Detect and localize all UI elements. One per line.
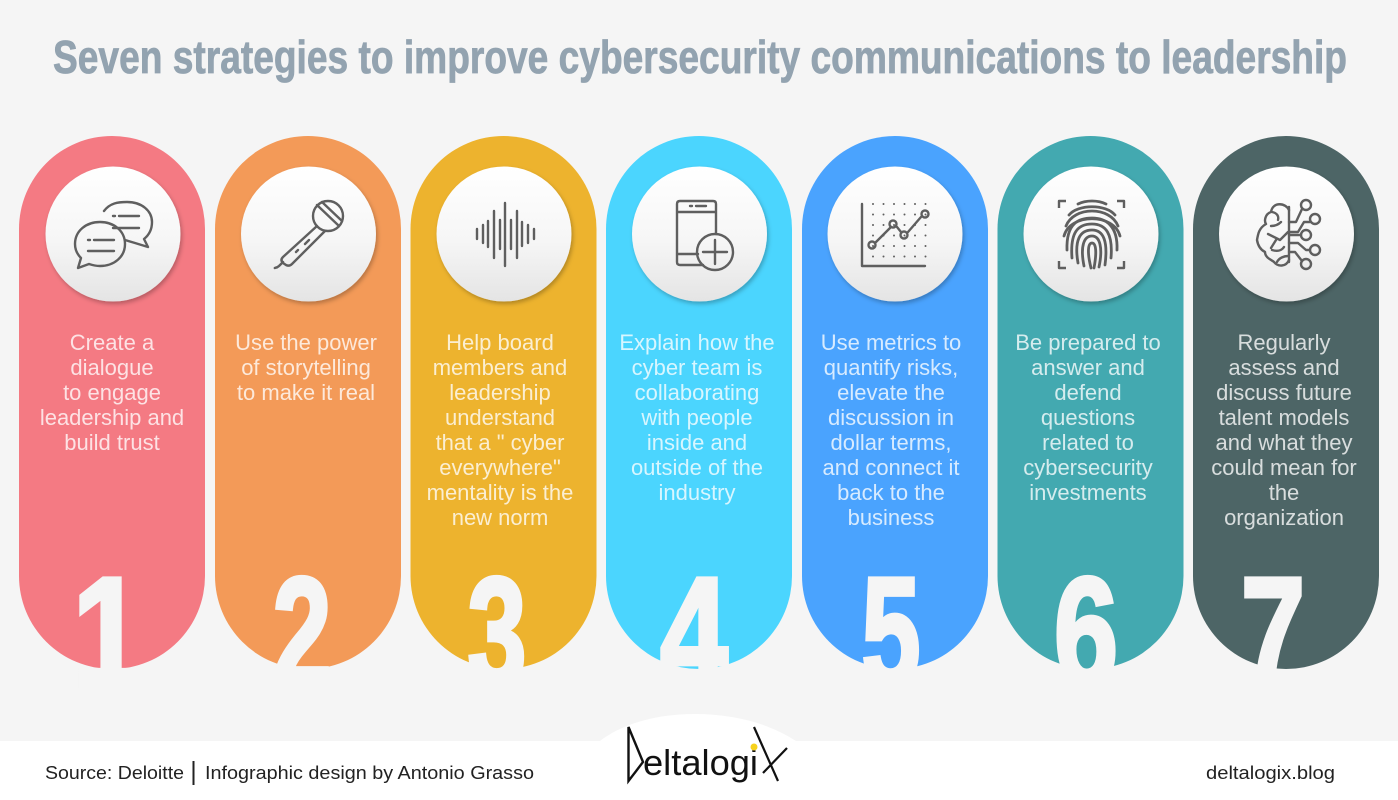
text: strategy 6: Be prepared to — [1015, 330, 1161, 355]
text: strategy 3: understand — [445, 405, 555, 430]
logo: Deltalogix: eltalogi — [643, 742, 758, 783]
text: strategy 6: investments — [1029, 480, 1147, 505]
text: strategy 4: cyber team is — [632, 355, 762, 380]
icon circle 4 — [632, 166, 767, 302]
icon circle 7 — [1219, 166, 1354, 302]
text: strategy 6: related to — [1042, 430, 1134, 455]
text: strategy 5 — [821, 330, 961, 530]
text: strategy 7: and what they — [1216, 430, 1352, 455]
number 2: 2 — [273, 546, 331, 720]
icon: phone with plus — [677, 201, 733, 270]
text: strategy 7: Regularly — [1238, 330, 1330, 355]
text: strategy 3: leadership — [449, 380, 551, 405]
number 1: 1 — [72, 546, 144, 720]
text: strategy 2: to make it real — [237, 380, 375, 405]
text: strategy 3: everywhere" — [439, 455, 561, 480]
text: strategy 1: build trust — [64, 430, 160, 455]
text: strategy 6: cybersecurity — [1023, 455, 1153, 480]
panel: strategy 3 — [410, 136, 596, 720]
text: strategy 5: business — [848, 505, 934, 530]
icon: microphone — [275, 201, 343, 268]
logo: Deltalogix — [628, 727, 787, 783]
footer website: deltalogix.blog — [1206, 763, 1335, 783]
text: strategy 7 — [1211, 330, 1357, 530]
text: strategy 3: Help board — [446, 330, 554, 355]
text: strategy 6: questions — [1041, 405, 1135, 430]
text: strategy 1 — [40, 330, 184, 455]
text: strategy 5: back to the — [837, 480, 945, 505]
text: strategy 7: talent models — [1219, 405, 1349, 430]
text: strategy 7: could mean for — [1211, 455, 1357, 480]
text: strategy 4 — [619, 330, 775, 505]
text: strategy 4: Explain how the — [619, 330, 775, 355]
icon: sound wave — [477, 203, 534, 266]
icon circle 6 — [1024, 166, 1158, 302]
text: strategy 7: the — [1269, 480, 1299, 505]
panel: strategy 2 — [215, 136, 401, 720]
footer band — [0, 714, 1398, 800]
text: strategy 7: organization — [1224, 505, 1344, 530]
text: strategy 1: leadership and — [40, 405, 184, 430]
panel: strategy 6 — [998, 136, 1184, 720]
icon circle 2 — [241, 166, 376, 302]
panel: strategy 5 — [802, 136, 988, 720]
text: strategy 5: quantify risks, — [824, 355, 958, 380]
text: strategy 5: discussion in — [828, 405, 954, 430]
text: strategy 3: new norm — [452, 505, 548, 530]
text: strategy 6: defend — [1054, 380, 1122, 405]
text: strategy 4: outside of the — [631, 455, 763, 480]
text: strategy 7: discuss future — [1216, 380, 1352, 405]
number 3: 3 — [468, 546, 526, 720]
text: strategy 5: Use metrics to — [821, 330, 961, 355]
text: strategy 4: collaborating — [635, 380, 759, 405]
number 5: 5 — [862, 546, 920, 720]
text: strategy 6: answer and — [1031, 355, 1145, 380]
text: strategy 2: of storytelling — [241, 355, 371, 380]
text: strategy 5: dollar terms, — [830, 430, 952, 455]
text: strategy 1: Create a — [70, 330, 155, 355]
text: strategy 2: Use the power — [235, 330, 377, 355]
number 7: 7 — [1241, 546, 1305, 720]
text: strategy 1: dialogue — [70, 355, 154, 380]
text: strategy 6 — [1015, 330, 1161, 505]
icon circle 5 — [828, 166, 962, 302]
text: strategy 5: elevate the — [837, 380, 945, 405]
panel: strategy 1 — [19, 136, 205, 720]
panel: strategy 4 — [606, 136, 792, 719]
text: strategy 5: and connect it — [823, 455, 959, 480]
text: strategy 3: that a " cyber — [436, 430, 564, 455]
number 6: 6 — [1054, 546, 1118, 720]
text: strategy 3 — [427, 330, 573, 530]
icon: brain circuit — [1257, 200, 1320, 269]
text: strategy 4: inside and — [647, 430, 747, 455]
text: strategy 2 — [235, 330, 377, 405]
icon circle 3 — [436, 166, 572, 302]
footer source credit: Source: Deloitte — [45, 763, 184, 783]
icon circle 1 — [46, 166, 180, 302]
text: strategy 7: assess and — [1228, 355, 1340, 380]
text: strategy 1: to engage — [63, 380, 161, 405]
number 4: 4 — [660, 544, 728, 719]
footer source credit: Infographic design by Antonio Grasso — [205, 763, 534, 783]
panel: strategy 7 — [1193, 136, 1379, 720]
icon: line chart — [862, 204, 928, 266]
text: strategy 3: members and — [433, 355, 567, 380]
text: strategy 4: industry — [658, 480, 736, 505]
icon: chat bubbles — [75, 202, 152, 268]
icon: fingerprint — [1059, 201, 1124, 268]
text: strategy 4: with people — [640, 405, 753, 430]
footer source credit — [45, 761, 534, 785]
text: strategy 3: mentality is the — [427, 480, 573, 505]
